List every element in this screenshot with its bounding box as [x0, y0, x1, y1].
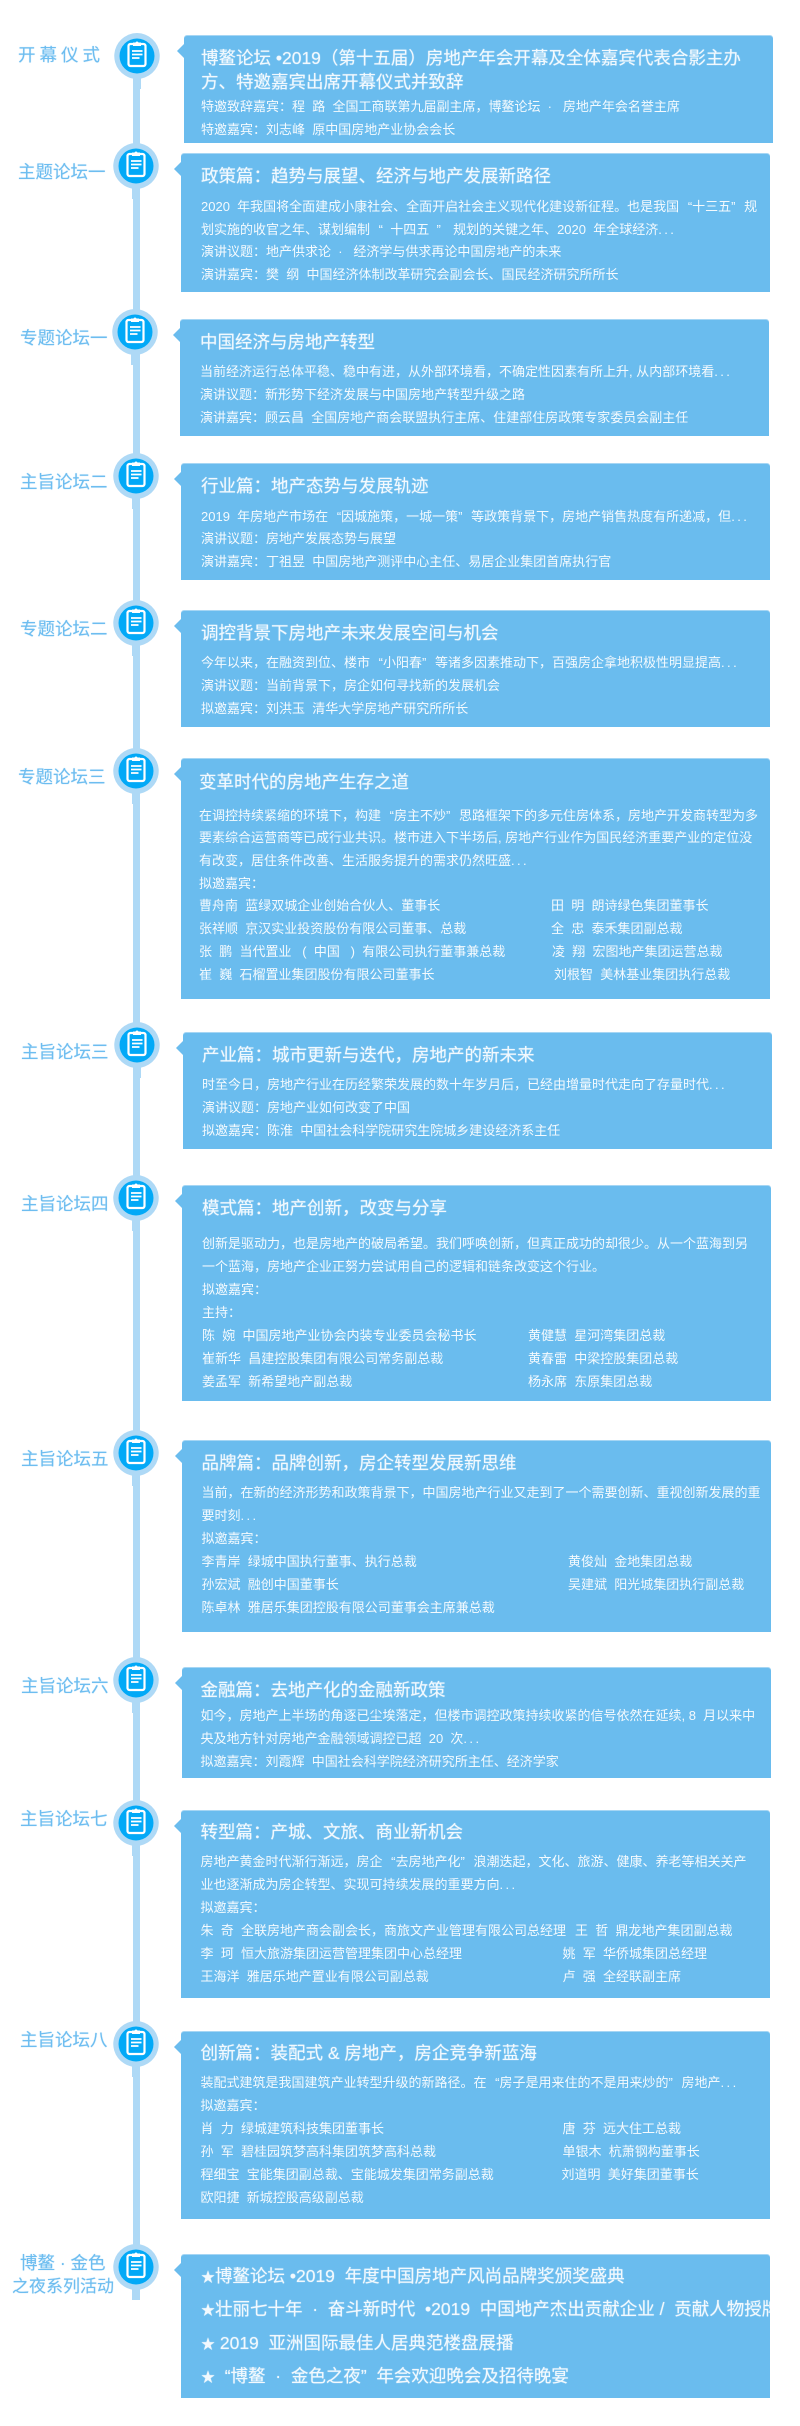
text: guest: 朱 奇 全联房地产商会副会长，商旅文产业管理有限公司总经理: [200, 1923, 566, 1938]
text: guest: 刘根智 美林基业集团执行总裁: [554, 967, 730, 982]
text: intro line 2: 央及地方针对房地产金融领域调控已超 20 次...: [200, 1731, 481, 1746]
heading: 创新篇：装配式 & 房地产，房企竞争新蓝海: [200, 2043, 537, 2063]
text: topic: 演讲议题：地产供求论 · 经济学与供求再论中国房地产的未来: [201, 244, 561, 259]
text: guest: 陈 婉 中国房地产业协会内装专业委员会秘书长: [202, 1328, 476, 1343]
label: theme forum 1: 主题论坛一: [18, 162, 106, 182]
icon: clipboard marker 6: [113, 748, 159, 804]
text: speaker: 拟邀嘉宾：刘洪玉 清华大学房地产研究所所长: [201, 701, 468, 716]
icon: clipboard marker 3: [112, 309, 158, 365]
panel: keynote forum 4: [182, 1186, 771, 1401]
text: speaker: 演讲嘉宾：樊 纲 中国经济体制改革研究会副会长、国民经济研究所所长: [201, 267, 618, 282]
text: speaker: 演讲嘉宾：丁祖昱 中国房地产测评中心主任、易居企业集团首席执行官: [201, 554, 611, 569]
panel: golden night events: [181, 2255, 770, 2398]
text: guest: 杨永席 东原集团总裁: [528, 1374, 652, 1389]
text: intro line 2: 要时刻...: [202, 1508, 259, 1523]
panel: special forum 2: [181, 611, 770, 727]
text: intro line 1: 当前，在新的经济形势和政策背景下，中国房地产行业又走到了一个需要创新、重视创新发展的重: [202, 1485, 761, 1500]
text: guest: 单银木 杭萧钢构董事长: [562, 2144, 700, 2159]
heading line 2: 方、特邀嘉宾出席开幕仪式并致辞: [201, 72, 464, 92]
text: intro line 1: “: [391, 1854, 396, 1869]
label: keynote forum 4: 主旨论坛四: [21, 1194, 108, 1214]
heading: 调控背景下房地产未来发展空间与机会: [201, 623, 498, 643]
icon: clipboard marker 8: [113, 1175, 159, 1231]
label: special forum 3: 专题论坛三: [18, 767, 106, 787]
text: intro line 1: 2020 年我国将全面建成小康社会、全面开启社会主义现代化建设新征程。也是我国 十三五 规: [201, 199, 757, 214]
text: speaker: 拟邀嘉宾：陈淮 中国社会科学院研究生院城乡建设经济系主任: [202, 1123, 560, 1138]
panel: keynote forum 3: [183, 1033, 772, 1149]
panel: keynote forum 6: [182, 1668, 771, 1778]
text: intro line 2: “: [379, 222, 383, 237]
text: event 2: ★壮丽七十年 · 奋斗新时代 •2019 中国地产杰出贡献企业 / 贡献人物授牌: [201, 2299, 770, 2319]
text: intro: ”: [458, 509, 463, 524]
text: special guest: 特邀嘉宾：刘志峰 原中国房地产业协会会长: [201, 122, 455, 137]
text: opening speaker: 特邀致辞嘉宾：程 路 全国工商联第九届副主席，博鳌论坛 · 房地产年会名誉主席: [201, 99, 680, 114]
text: speaker: 演讲嘉宾：顾云昌 全国房地产商会联盟执行主席、住建部住房政策专家委员会副主任: [200, 410, 688, 425]
text: guests heading: 拟邀嘉宾：: [199, 876, 264, 891]
icon: clipboard marker 1: [114, 33, 160, 89]
text: intro: “: [379, 655, 383, 670]
text: intro line 1: ”: [731, 199, 736, 214]
text: intro line 2: 一个蓝海，房地产企业正努力尝试用自己的逻辑和链条改变这个行业。: [202, 1259, 605, 1274]
text: topic: 演讲议题：房地产业如何改变了中国: [202, 1100, 410, 1115]
text: intro line 2: 业也逐渐成为房企转型、实现可持续发展的重要方向...: [200, 1877, 518, 1892]
text: event 3: ★ 2019 亚洲国际最佳人居典范楼盘展播: [201, 2333, 514, 2353]
icon: clipboard marker 5: [113, 600, 159, 656]
text: intro line 1: 在调控持续紧缩的环境下，构建 房主不炒 思路框架下的多元住房体系，房地产开发商转型为多: [199, 808, 758, 823]
text: guests heading: 拟邀嘉宾：: [202, 1282, 267, 1297]
text: intro line 2: 要素综合运营商等已成行业共识。楼市进入下半场后, 房地产行业作为国民经济重要产业的定位没: [199, 830, 752, 845]
text: guests heading: 拟邀嘉宾：: [200, 2098, 266, 2113]
heading: 行业篇：地产态势与发展轨迹: [201, 476, 428, 496]
text: intro: ”: [669, 2075, 673, 2090]
text: guest: 黄春雷 中梁控股集团总裁: [528, 1351, 678, 1366]
text: topic: 演讲议题：新形势下经济发展与中国房地产转型升级之路: [200, 387, 525, 402]
label: keynote forum 5: 主旨论坛五: [21, 1449, 108, 1469]
text: host: 主持：: [202, 1305, 241, 1320]
label: special forum 2: 专题论坛二: [20, 619, 108, 639]
label: special forum 1: 专题论坛一: [20, 328, 108, 348]
text: guests heading: 拟邀嘉宾：: [202, 1531, 267, 1546]
text: intro line 1: ”: [446, 808, 450, 823]
text: guest: 唐 芬 远大住工总裁: [562, 2121, 681, 2136]
heading: 政策篇：趋势与展望、经济与地产发展新路径: [201, 166, 551, 186]
text: guest: 卢 强 全经联副主席: [562, 1969, 681, 1984]
text: guests heading: 拟邀嘉宾：: [200, 1900, 266, 1915]
text: guest: 姜孟军 新希望地产副总裁: [202, 1374, 352, 1389]
text: intro: 当前经济运行总体平稳、稳中有进，从外部环境看，不确定性因素有所上升, 从内部环境看...: [200, 364, 732, 379]
text: intro: ”: [422, 655, 426, 670]
label: keynote forum 2: 主旨论坛二: [20, 472, 108, 492]
text: intro: 今年以来，在融资到位、楼市 小阳春 等诸多因素推动下，百强房企拿地积极性明显提高...: [201, 655, 739, 670]
text: guest: 张祥顺 京汉实业投资股份有限公司董事、总裁: [199, 921, 466, 936]
text: guest: 肖 力 绿城建筑科技集团董事长: [200, 2121, 384, 2136]
text: intro: 时至今日，房地产行业在历经繁荣发展的数十年岁月后，已经由增量时代走向了存量时代...: [202, 1077, 727, 1092]
icon: clipboard marker 7: [114, 1022, 160, 1078]
icon: clipboard marker 11: [113, 1800, 159, 1856]
label: golden night line 2: 之夜系列活动: [12, 2277, 114, 2296]
text: guest: 欧阳捷 新城控股高级副总裁: [200, 2190, 364, 2205]
panel: keynote forum 8: [181, 2032, 770, 2219]
heading: 产业篇：城市更新与迭代，房地产的新未来: [202, 1045, 534, 1065]
text: topic: 演讲议题：房地产发展态势与展望: [201, 531, 396, 546]
text: intro line 1: “: [688, 199, 692, 214]
text: intro line 1: “: [390, 808, 394, 823]
text: guest: 刘道明 美好集团董事长: [562, 2167, 699, 2182]
text: intro: “: [495, 2075, 500, 2090]
icon: clipboard marker 4: [113, 453, 159, 509]
text: guest: 李青岸 绿城中国执行董事、执行总裁: [202, 1554, 417, 1569]
label: opening ceremony: 开幕仪式: [18, 45, 104, 65]
text: guest: 凌 翔 宏图地产集团运营总裁: [552, 944, 722, 959]
panel: keynote forum 2: [181, 464, 770, 580]
panel: special forum 1: [180, 320, 769, 436]
heading: 品牌篇：品牌创新，房企转型发展新思维: [202, 1453, 516, 1473]
text: guest: 吴建斌 阳光城集团执行副总裁: [568, 1577, 744, 1592]
text: intro: “: [337, 509, 341, 524]
text: guest: 王 哲 鼎龙地产集团副总裁: [575, 1923, 732, 1938]
text: guest: 田 明 朗诗绿色集团董事长: [551, 898, 708, 913]
text: guest: 黄俊灿 金地集团总裁: [568, 1554, 692, 1569]
text: event 1: ★博鳌论坛 •2019 年度中国房地产风尚品牌奖颁奖盛典: [201, 2266, 625, 2286]
text: intro line 1: 创新是驱动力，也是房地产的破局希望。我们呼唤创新，但真正成功的却很少。从一个蓝海到另: [202, 1236, 748, 1251]
text: guest: 全 忠 泰禾集团副总裁: [551, 921, 682, 936]
text: guest: 孙 军 碧桂园筑梦高科集团筑梦高科总裁: [200, 2144, 436, 2159]
text: guest: 程细宝 宝能集团副总裁、宝能城发集团常务副总裁: [200, 2167, 494, 2182]
text: intro line 1: ”: [461, 1854, 465, 1869]
text: intro line 1: 房地产黄金时代渐行渐远，房企 去房地产化 浪潮迭起，文化、旅游、健康、养老等相关关产: [200, 1854, 747, 1869]
text: intro line 3: 有改变，居住条件改善、生活服务提升的需求仍然旺盛...: [199, 853, 529, 868]
text: intro: 装配式建筑是我国建筑产业转型升级的新路径。在 房子是用来住的不是用来炒的 房地产...: [200, 2075, 739, 2090]
text: intro: 2019 年房地产市场在 因城施策，一城一策 等政策背景下，房地产销售热度有所递减，但...: [201, 509, 749, 524]
text: intro line 2: 划实施的收官之年、谋划编制 十四五 规划的关键之年、2020 年全球经济...: [201, 222, 676, 237]
text: guest: 王海洋 雅居乐地产置业有限公司副总裁: [200, 1969, 429, 1984]
heading: 模式篇：地产创新，改变与分享: [202, 1198, 447, 1218]
text: guest: 张 鹏 当代置业 ( 中国 ) 有限公司执行董事兼总裁: [199, 944, 505, 959]
icon: clipboard marker 12: [113, 2021, 159, 2077]
text: intro line 2: ”: [436, 222, 441, 237]
panel: keynote forum 7: [181, 1811, 770, 1998]
text: guest: 黄健慧 星河湾集团总裁: [528, 1328, 665, 1343]
text: intro line 1: 如今，房地产上半场的角逐已尘埃落定，但楼市调控政策持续收紧的信号依然在延续, 8 月以来中: [200, 1708, 755, 1723]
text: guest: 曹舟南 蓝绿双城企业创始合伙人、董事长: [199, 898, 440, 913]
text: speaker: 拟邀嘉宾：刘霞辉 中国社会科学院经济研究所主任、经济学家: [200, 1754, 559, 1769]
heading: 金融篇：去地产化的金融新政策: [200, 1680, 446, 1700]
label: golden night line 1: 博鳌 · 金色: [20, 2253, 106, 2273]
panel: opening ceremony: [184, 36, 773, 143]
heading: 转型篇：产城、文旅、商业新机会: [200, 1822, 463, 1842]
heading: 变革时代的房地产生存之道: [199, 772, 409, 792]
text: guest: 崔 巍 石榴置业集团股份有限公司董事长: [199, 967, 434, 982]
timeline spine: [133, 56, 140, 2267]
label: keynote forum 6: 主旨论坛六: [21, 1676, 108, 1696]
panel: special forum 3: [181, 759, 770, 999]
text: guest: 李 珂 恒大旅游集团运营管理集团中心总经理: [200, 1946, 462, 1961]
icon: clipboard marker 9: [113, 1430, 159, 1486]
panel: theme forum 1: [181, 154, 770, 292]
panel: keynote forum 5: [182, 1441, 771, 1632]
label: keynote forum 7: 主旨论坛七: [20, 1809, 108, 1829]
text: guest: 孙宏斌 融创中国董事长: [202, 1577, 339, 1592]
text: guest: 姚 军 华侨城集团总经理: [562, 1946, 707, 1961]
icon: clipboard marker 2: [113, 143, 159, 199]
icon: clipboard marker 10: [113, 1657, 159, 1713]
text: guest: 崔新华 昌建控股集团有限公司常务副总裁: [202, 1351, 443, 1366]
heading: 中国经济与房地产转型: [200, 332, 375, 352]
icon: clipboard marker 13: [113, 2244, 159, 2300]
text: topic: 演讲议题：当前背景下，房企如何寻找新的发展机会: [201, 678, 500, 693]
heading: 博鳌论坛 •2019（第十五届）房地产年会开幕及全体嘉宾代表合影主办: [201, 48, 741, 68]
text: guest: 陈卓林 雅居乐集团控股有限公司董事会主席兼总裁: [202, 1600, 495, 1615]
label: keynote forum 8: 主旨论坛八: [20, 2030, 108, 2050]
text: event 4: ★ “博鳌 · 金色之夜” 年会欢迎晚会及招待晚宴: [201, 2366, 569, 2386]
label: keynote forum 3: 主旨论坛三: [21, 1042, 108, 1062]
